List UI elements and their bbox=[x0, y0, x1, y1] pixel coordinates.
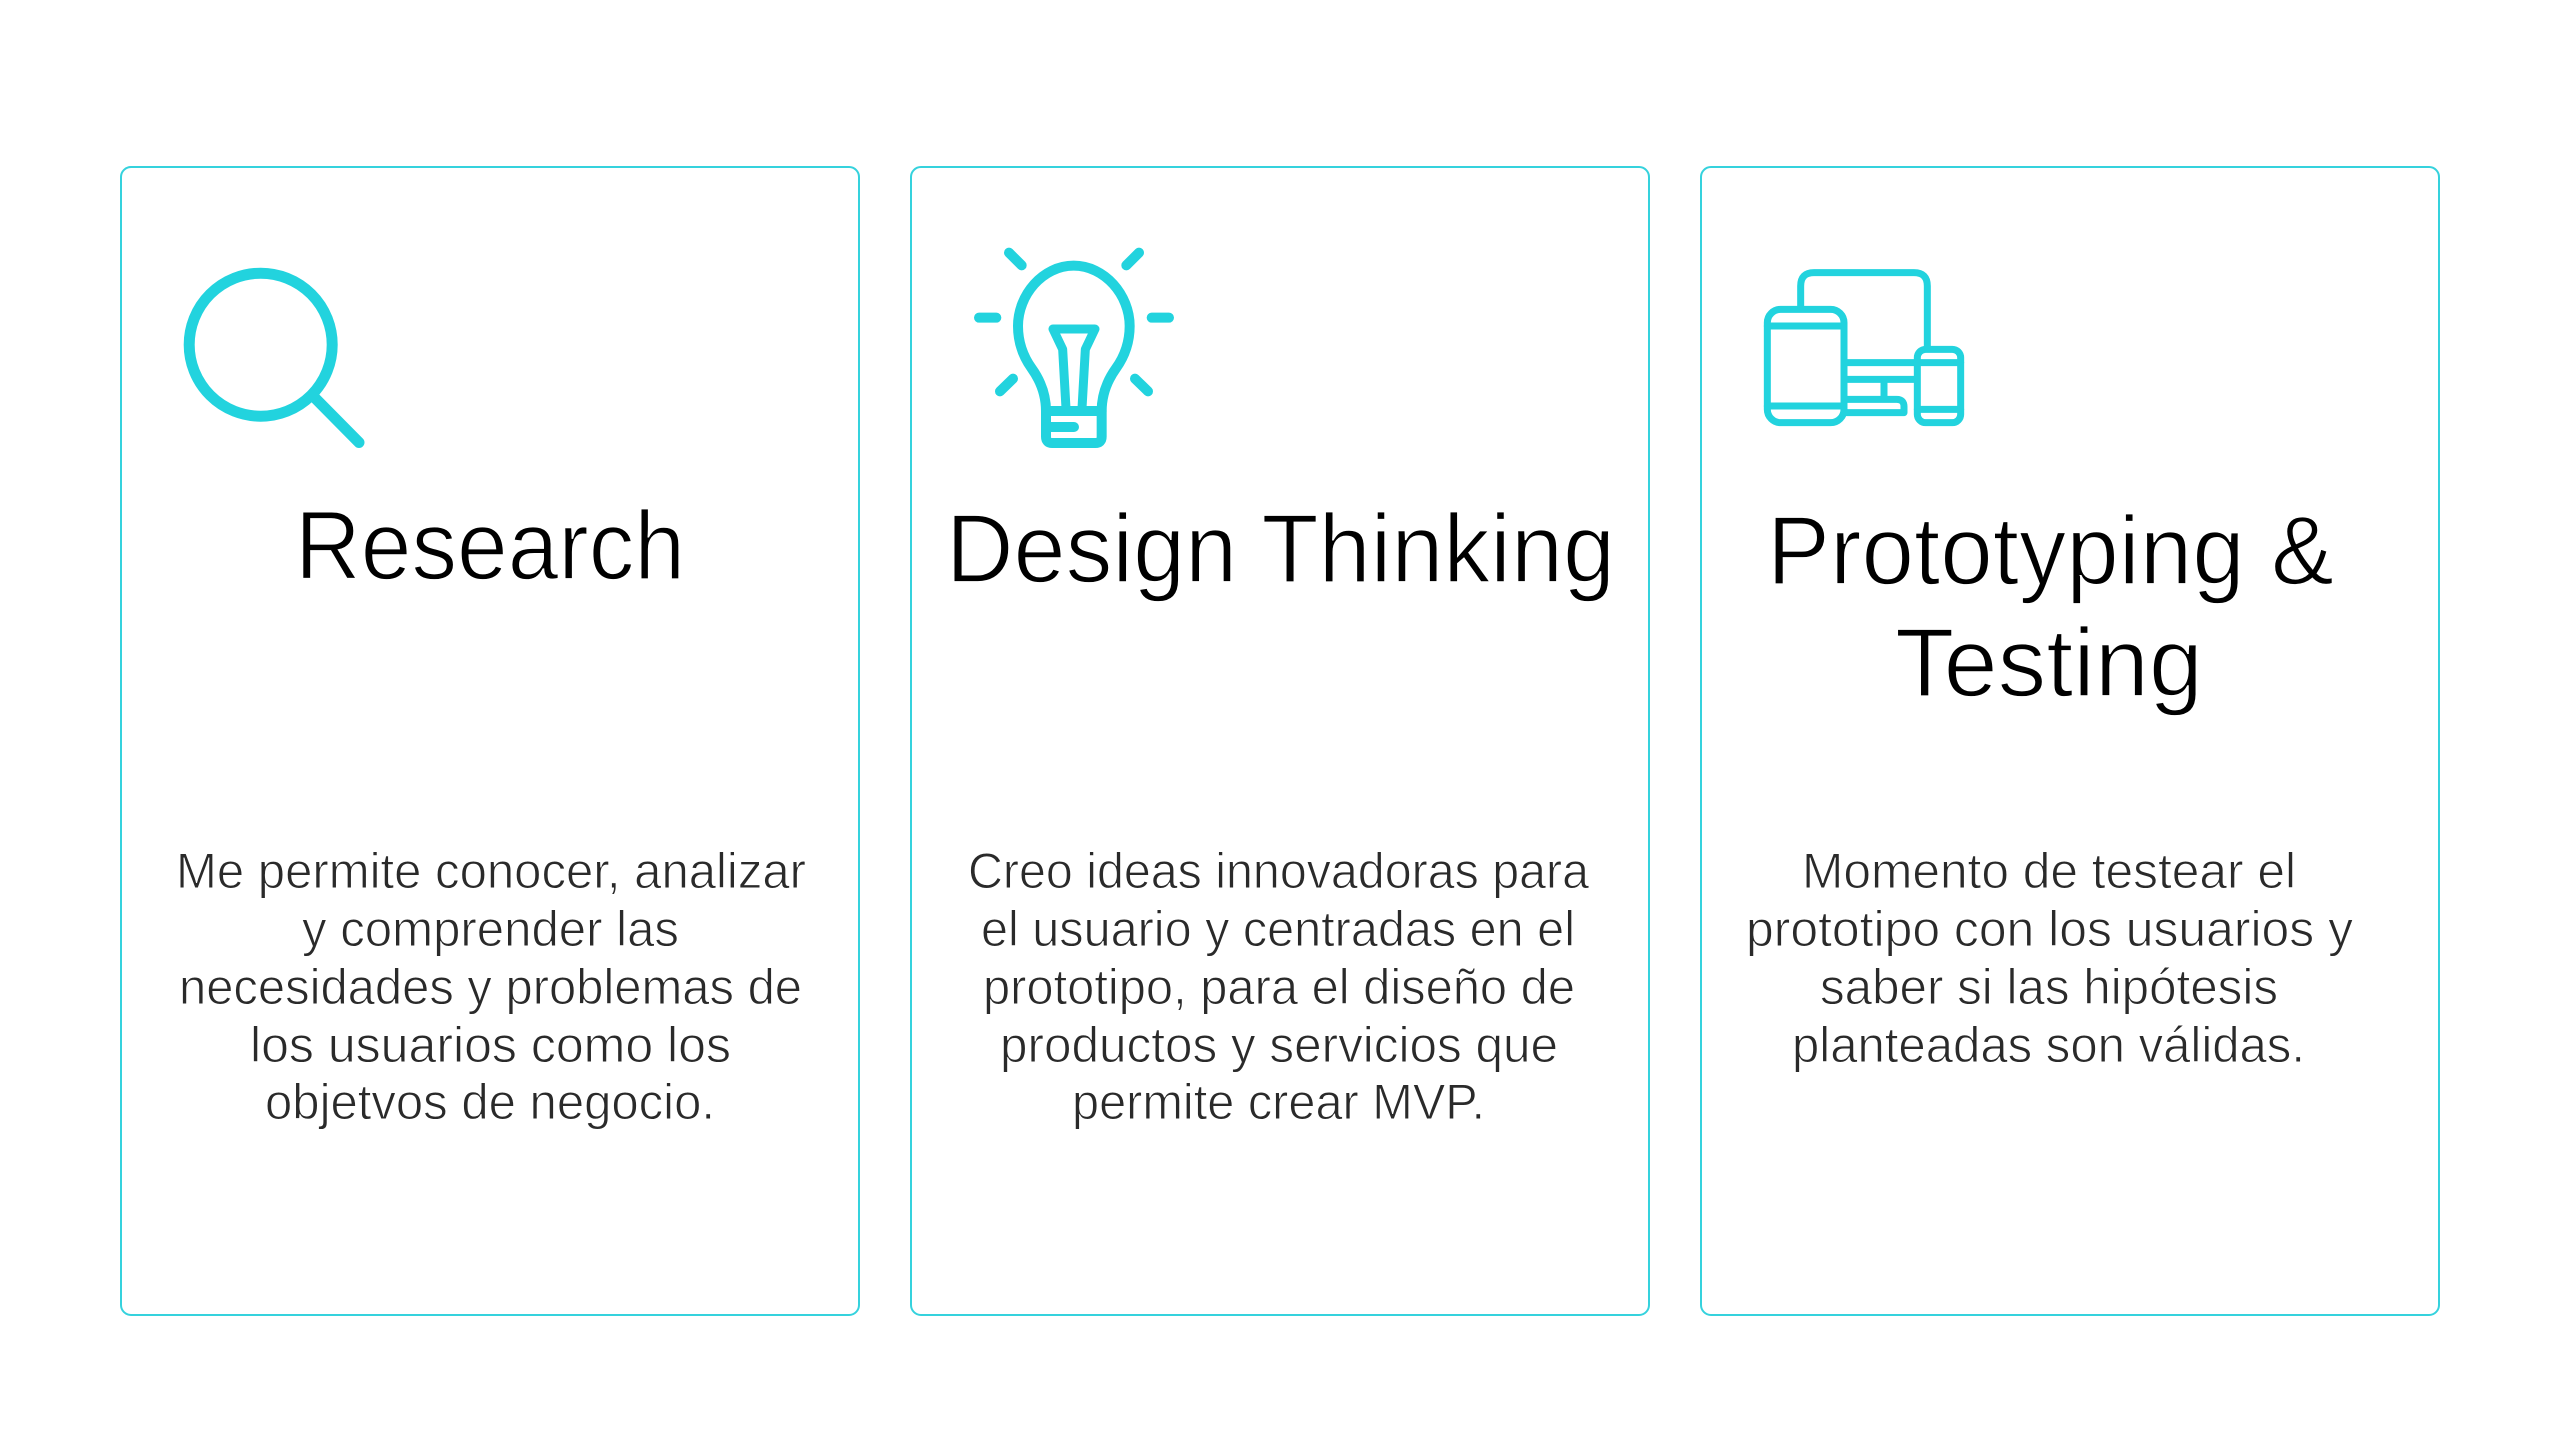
text block: design thinking description: Creo ideas innovadoras para bbox=[968, 843, 1589, 899]
text block: prototyping description: prototipo con los usuarios y bbox=[1746, 901, 2353, 957]
text block: design thinking description bbox=[968, 843, 1589, 1130]
heading: prototyping and testing: Testing bbox=[1895, 608, 2203, 717]
icon: responsive devices bbox=[1767, 273, 1961, 423]
text block: prototyping description: Momento de testear el bbox=[1802, 843, 2296, 899]
text block: design thinking description: el usuario y centradas en el bbox=[981, 901, 1575, 957]
text block: research description: necesidades y problemas de bbox=[179, 959, 802, 1015]
panel: research bbox=[121, 167, 859, 1315]
panel: prototyping and testing bbox=[1701, 167, 2439, 1315]
text block: design thinking description: prototipo, para el diseño de bbox=[983, 959, 1575, 1015]
heading: prototyping and testing bbox=[1767, 496, 2334, 717]
text block: prototyping description: saber si las hipótesis bbox=[1820, 959, 2278, 1015]
text block: research description: objetvos de negocio. bbox=[265, 1074, 715, 1130]
text block: design thinking description: permite crear MVP. bbox=[1072, 1074, 1485, 1130]
text block: research description: los usuarios como los bbox=[250, 1017, 731, 1073]
text block: research description: y comprender las bbox=[302, 901, 679, 957]
heading: research: Research bbox=[295, 491, 685, 600]
icon: light bulb bbox=[979, 253, 1169, 443]
icon: magnifying glass bbox=[189, 273, 359, 442]
heading: prototyping and testing: Prototyping & bbox=[1767, 496, 2334, 605]
panel: design thinking bbox=[911, 167, 1649, 1315]
text block: research description bbox=[176, 843, 806, 1130]
heading: design thinking: Design Thinking bbox=[946, 494, 1615, 603]
text block: design thinking description: productos y servicios que bbox=[1000, 1017, 1558, 1073]
text block: research description: Me permite conocer, analizar bbox=[176, 843, 806, 899]
text block: prototyping description: planteadas son válidas. bbox=[1792, 1017, 2305, 1073]
text block: prototyping description bbox=[1746, 843, 2353, 1073]
